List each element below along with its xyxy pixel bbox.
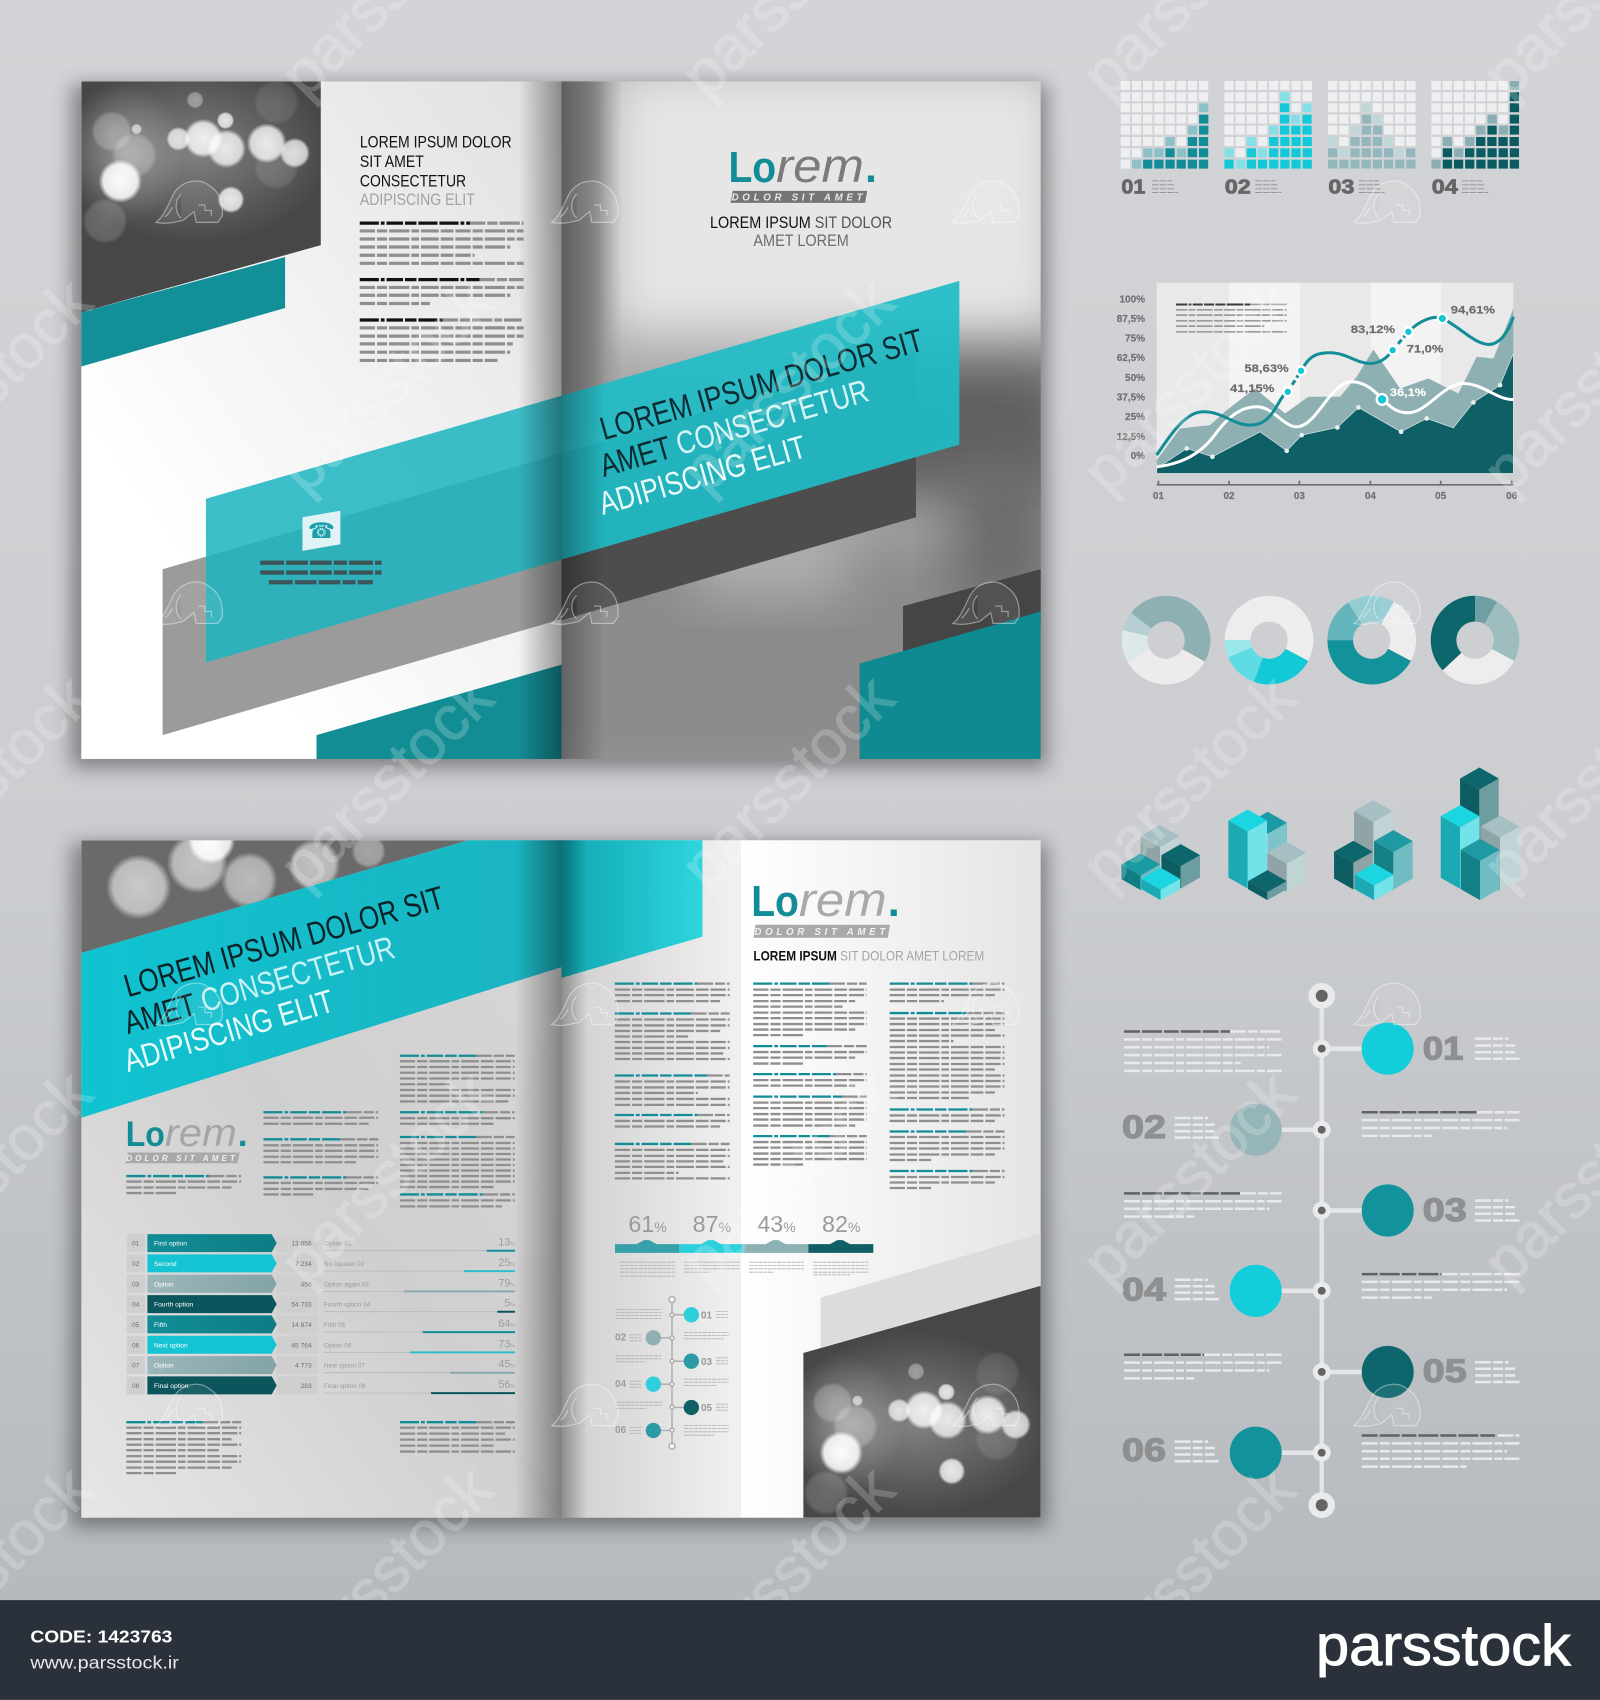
grid chart labels: 04	[1432, 175, 1458, 198]
blocks 4	[1441, 767, 1519, 900]
percent stats: 43%	[757, 1211, 796, 1237]
blocks 3	[1334, 800, 1413, 900]
cyan diagonal band right page	[562, 281, 959, 559]
row labels: 73%	[498, 1338, 515, 1350]
logo: Lorem right page	[751, 874, 900, 927]
logo: Lorem cover: Lo	[728, 144, 776, 192]
timeline numbers: 03	[1423, 1191, 1467, 1228]
right page grey column	[562, 840, 740, 1518]
cover subtitle	[710, 214, 892, 250]
watermark: parsstock text: parsstock	[1069, 662, 1309, 902]
left page heading	[360, 133, 512, 209]
brochure: cover spread	[60, 72, 1059, 780]
row labels: 01	[132, 1241, 140, 1248]
blocks 2	[1228, 809, 1306, 900]
timeline number captions	[1175, 1039, 1519, 1461]
right page subtitle: LOREM IPSUM SIT DOLOR AMET LOREM	[753, 948, 984, 964]
row labels: Fifth	[154, 1322, 167, 1329]
logo: Lorem left page: .	[238, 1114, 248, 1154]
x axis labels: 01	[1153, 491, 1164, 502]
left page heading: LOREM IPSUM DOLOR	[360, 133, 512, 152]
logo: Lorem cover	[728, 140, 877, 193]
timeline nodes	[1308, 983, 1335, 1518]
left page heading: SIT AMET	[360, 152, 424, 171]
bokeh top photo	[82, 840, 468, 953]
grid chart labels	[1121, 175, 1458, 198]
y axis labels: 50%	[1125, 373, 1145, 384]
bokeh photo	[81, 81, 321, 312]
teal curve	[1157, 317, 1513, 455]
spine shading	[515, 840, 588, 1518]
watermark: parsstock text: parsstock	[1069, 266, 1309, 506]
row labels: 79%	[498, 1277, 515, 1289]
brochure shadow	[72, 843, 1047, 1526]
row labels: 07	[132, 1363, 140, 1370]
x axis labels	[1153, 491, 1518, 502]
row labels: 4 773	[295, 1363, 312, 1370]
cover subtitle: LOREM IPSUM SIT DOLOR	[710, 214, 892, 232]
row labels: First option	[154, 1241, 187, 1248]
timeline numbers	[1122, 1029, 1467, 1468]
grid chart labels: 02	[1225, 175, 1251, 198]
vertical timeline	[1122, 983, 1519, 1518]
watermark: parsstock text: parsstock	[266, 1453, 506, 1693]
mini timeline: 03	[701, 1357, 713, 1368]
inner headline: AMET CONSECTETUR	[120, 929, 399, 1041]
grid chart 02	[1224, 85, 1313, 164]
curve value labels: 58,63%	[1244, 363, 1289, 375]
left page background	[81, 81, 562, 759]
y axis labels: 100%	[1119, 294, 1145, 305]
chart text	[1176, 304, 1287, 332]
timeline spine and connectors	[1277, 996, 1367, 1505]
cover headline: ADIPISCING ELIT	[595, 429, 810, 522]
row labels: 283	[301, 1383, 312, 1390]
logo tagline strap: DOLOR SIT AMET	[126, 1154, 238, 1163]
grid chart 03	[1328, 85, 1417, 164]
row labels: 45%	[498, 1359, 515, 1371]
percent captions	[620, 1262, 868, 1276]
row labels: Option again 03	[324, 1281, 369, 1288]
right page white area	[740, 840, 1041, 1518]
left page heading: CONSECTETUR	[360, 172, 466, 191]
logo: Lorem left page: Lo	[126, 1114, 165, 1154]
teal corner band	[81, 257, 285, 367]
body text columns	[126, 984, 1004, 1473]
logo: Lorem cover: .	[865, 144, 877, 192]
watermark: parsstock text: parsstock	[1069, 1057, 1309, 1298]
row labels: 02	[132, 1261, 140, 1268]
row labels: Fourth option	[154, 1302, 194, 1309]
cyan diagonal band	[81, 840, 562, 1118]
row labels: Option 01	[324, 1241, 352, 1248]
logo: Lorem right page: Lo	[751, 878, 799, 926]
row labels: Option	[154, 1363, 174, 1370]
row labels: 54 733	[291, 1302, 312, 1309]
curve value labels: 41,15%	[1230, 383, 1275, 395]
x axis	[1157, 481, 1513, 485]
right page blurred photo	[562, 81, 1041, 758]
footer code: CODE: 1423763	[30, 1626, 173, 1646]
teal corner right page	[860, 612, 1041, 759]
timeline numbers: 06	[1122, 1431, 1166, 1468]
cyan band right page	[562, 840, 702, 978]
curve markers	[1283, 314, 1447, 405]
light area series	[1157, 308, 1513, 473]
arrow rows	[147, 1234, 277, 1394]
grey diagonal band left	[163, 453, 562, 735]
icon: telephone on card	[302, 511, 340, 551]
row labels: 05	[132, 1322, 140, 1329]
timeline numbers: 01	[1423, 1029, 1463, 1067]
timeline text block headers	[1124, 1032, 1497, 1436]
y axis labels: 0%	[1131, 451, 1145, 462]
dark diagonal band right	[562, 351, 916, 620]
x axis labels: 04	[1365, 491, 1376, 502]
table: options with arrows and progress bars	[127, 1234, 515, 1394]
donut charts	[1122, 596, 1520, 685]
curve value labels: 71,0%	[1407, 343, 1444, 355]
row cells	[127, 1234, 317, 1394]
row labels: 456	[301, 1281, 312, 1288]
mini timeline: 04	[615, 1379, 627, 1390]
watermark: parsstock text: parsstock	[1069, 1453, 1309, 1693]
progress bars	[404, 1251, 515, 1393]
grid chart 01	[1121, 85, 1209, 164]
cover subtitle: AMET LOREM	[753, 232, 849, 250]
cover headline: LOREM IPSUM DOLOR SIT	[596, 322, 927, 447]
grid chart labels: 03	[1328, 175, 1354, 198]
stats and mini timeline	[615, 1211, 873, 1449]
mini timeline: 05	[701, 1403, 713, 1414]
watermark: parsstock text: parsstock	[667, 1453, 908, 1693]
curve value labels: 36,1%	[1390, 387, 1426, 399]
chart column stripes	[1157, 283, 1513, 473]
inner headline	[120, 879, 448, 1079]
donut 1	[1122, 596, 1210, 684]
percent stats: 82%	[822, 1211, 860, 1237]
percent stats	[628, 1211, 860, 1237]
logo: Lorem left page	[126, 1112, 248, 1155]
row labels: Second	[154, 1261, 177, 1268]
timeline numbers: 05	[1423, 1352, 1467, 1389]
dashed curve segments	[1288, 332, 1408, 392]
row labels	[132, 1237, 515, 1391]
donut 3	[1328, 597, 1415, 684]
spine shading	[518, 81, 605, 759]
y axis labels: 25%	[1125, 412, 1145, 423]
timeline numbers: 02	[1122, 1108, 1166, 1145]
row labels: Fourth option 04	[324, 1302, 371, 1309]
logo: Lorem cover: rem	[776, 140, 864, 193]
y axis labels	[1117, 294, 1145, 462]
watermark: parsstock text: parsstock	[667, 662, 908, 902]
grid chart labels: 01	[1121, 175, 1145, 198]
watermark: parsstock text: parsstock	[667, 266, 908, 506]
grid chart captions	[1152, 181, 1488, 192]
watermark: parsstock text: parsstock	[667, 1057, 908, 1298]
x axis labels: 06	[1506, 491, 1518, 502]
row labels: 25%	[498, 1257, 515, 1269]
watermark: parsstock text: parsstock	[266, 662, 506, 902]
grid charts 01-04	[1121, 85, 1520, 198]
donut 4	[1431, 596, 1520, 685]
logo: Lorem right page: .	[888, 878, 900, 926]
row labels: 5%	[504, 1298, 515, 1310]
row labels: Option 06	[324, 1342, 352, 1349]
mini timeline	[615, 1296, 729, 1449]
row labels: 13%	[498, 1237, 515, 1249]
grid chart 04	[1431, 85, 1520, 164]
row labels: Final option	[154, 1383, 189, 1390]
mini timeline: 02	[615, 1332, 627, 1343]
row labels: 06	[132, 1342, 140, 1349]
row labels: 14 874	[291, 1322, 312, 1329]
white curve	[1157, 382, 1513, 467]
isometric block charts	[1121, 767, 1519, 900]
y axis labels: 87,5%	[1117, 314, 1145, 325]
row labels: 13 056	[291, 1241, 312, 1248]
left page heading: ADIPISCING ELIT	[360, 190, 475, 209]
footer url: www.parsstock.ir	[29, 1652, 179, 1672]
row labels: 56%	[498, 1379, 515, 1391]
blocks 1	[1121, 825, 1200, 900]
percent stats: 61%	[628, 1211, 667, 1237]
left page text blocks	[360, 223, 524, 360]
teal corner left page	[317, 665, 562, 759]
inner headline: ADIPISCING ELIT	[120, 983, 338, 1079]
bokeh bottom photo	[803, 1286, 1041, 1518]
watermark: parsstock text: parsstock	[266, 1057, 506, 1298]
y axis labels: 37,5%	[1117, 392, 1145, 403]
timeline numbers: 04	[1122, 1271, 1166, 1308]
cyan diagonal band left page	[206, 396, 562, 662]
dark block right page	[903, 569, 1041, 661]
percent stats: 87%	[693, 1211, 731, 1237]
donut 2	[1226, 598, 1312, 683]
row labels: Fifth 05	[324, 1322, 346, 1329]
row labels: 7 234	[295, 1261, 312, 1268]
curve value labels: 94,61%	[1451, 304, 1495, 316]
x axis labels: 03	[1294, 491, 1305, 502]
light grey corner shape	[821, 1234, 1041, 1348]
row labels: No Aquaan 02	[324, 1261, 365, 1268]
timeline circles	[1230, 1023, 1414, 1479]
logo tagline strap: DOLOR SIT AMET	[754, 927, 889, 938]
contact text bars	[260, 563, 382, 582]
row labels: Next option	[154, 1342, 188, 1349]
row labels: 04	[132, 1302, 140, 1309]
row labels: Option	[154, 1281, 174, 1288]
y axis labels: 12,5%	[1117, 432, 1145, 443]
area and line chart	[1117, 283, 1518, 502]
row labels: Final option 08	[324, 1383, 366, 1390]
x axis labels: 02	[1223, 491, 1235, 502]
icon: telephone on card: ☎	[308, 519, 335, 544]
percent bar	[615, 1240, 873, 1253]
logo tagline strap: DOLOR SIT AMET	[732, 193, 866, 204]
curve value labels: 83,12%	[1351, 324, 1395, 336]
logo: Lorem right page: rem	[799, 874, 887, 927]
row labels: 03	[132, 1281, 140, 1288]
row labels: Next option 07	[324, 1363, 365, 1370]
dark area series	[1157, 353, 1513, 473]
mini timeline: 01	[701, 1310, 713, 1321]
mini timeline: 06	[615, 1425, 627, 1436]
row labels: 08	[132, 1383, 140, 1390]
watermark: parsstock text: parsstock	[266, 266, 506, 506]
curve value labels	[1230, 304, 1495, 399]
area data points	[1184, 383, 1502, 459]
inner headline: LOREM IPSUM DOLOR SIT	[120, 879, 448, 1004]
footer bar	[0, 1600, 1600, 1700]
cover headline: AMET CONSECTETUR	[596, 373, 872, 484]
cover headline	[595, 322, 927, 522]
row labels: 64%	[498, 1318, 515, 1330]
y axis labels: 75%	[1125, 333, 1145, 344]
x axis labels: 05	[1435, 491, 1447, 502]
y axis labels: 62,5%	[1117, 353, 1145, 364]
row labels: 45 764	[291, 1342, 312, 1349]
logo: Lorem left page: rem	[165, 1112, 237, 1155]
watermark: elephant marks	[156, 181, 1420, 1427]
timeline text block bodies	[1124, 1032, 1519, 1467]
brochure shadow	[72, 85, 1047, 768]
row rules	[323, 1251, 515, 1393]
footer logo: parsstock	[1316, 1614, 1571, 1678]
brochure: inner spread	[72, 816, 1051, 1597]
left page background	[81, 840, 562, 1518]
